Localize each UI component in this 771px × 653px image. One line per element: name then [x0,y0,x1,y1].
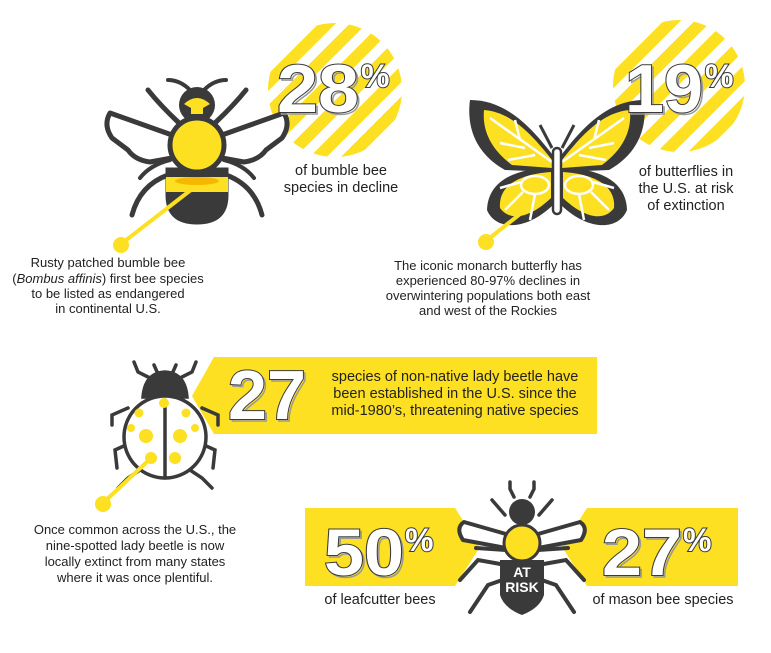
stat text: of bumble bee [295,163,387,179]
number 19% [625,51,733,129]
caption: where it was once plentiful. [56,570,213,585]
stat text: species of non-native lady beetle have [332,369,578,385]
caption: Once common across the U.S., the [34,522,236,537]
panel: bumble bee [12,23,402,316]
icon: butterfly [469,100,645,225]
caption: to be listed as endangered [31,286,185,301]
number 19%: 19 [627,53,705,129]
caption: Rusty patched bumble bee [31,255,185,270]
icon: lady beetle [112,362,218,488]
left banner [305,508,480,586]
caption: overwintering populations both east [386,288,591,303]
caption: (Bombus affinis) first bee species [12,271,204,286]
panel: butterfly [386,20,745,318]
number 50%: 50 [326,517,406,591]
caption: and west of the Rockies [419,303,558,318]
number 50%: % [405,522,433,558]
callout line and dot [478,210,525,250]
caption: nine-spotted lady beetle is now [46,538,225,553]
number 50%: 50 [324,515,404,589]
number 28%: % [361,58,389,94]
callout line and dot [113,186,196,253]
striped circle 28 [268,23,402,157]
icon: bumble bee [107,80,287,224]
number 19%: % [705,58,733,94]
caption: experienced 80-97% declines in [396,273,580,288]
number 27: 27 [228,356,306,434]
panel: solitary bees: RISK [505,579,539,595]
stat text: species in decline [284,180,398,196]
stat text right: of mason bee species [592,592,734,608]
number 28%: 28 [277,51,359,127]
number 27%: % [683,522,711,558]
number 27%: 27 [604,517,684,591]
stat text: mid-1980’s, threatening native species [331,403,579,419]
yellow banner [192,357,597,434]
stat text left: of leafcutter bees [324,592,436,608]
number 28%: 28 [279,53,361,129]
striped circle 19 [613,20,745,152]
panel: solitary bees [305,482,738,615]
stat text: been established in the U.S. since the [333,386,577,402]
label: at risk: AT [513,564,531,580]
caption: The iconic monarch butterfly has [394,258,582,273]
caption: in continental U.S. [55,301,161,316]
callout line and dot [95,459,150,512]
number 27% [602,515,711,591]
stat text: the U.S. at risk [638,181,734,197]
number 50% [324,515,433,591]
number 19%: 19 [625,51,703,127]
number 27%: 27 [602,515,682,589]
icon: at-risk bee [459,482,585,615]
stat text: of butterflies in [639,164,733,180]
number 28% [277,51,389,129]
stat text: of extinction [647,198,725,214]
caption: locally extinct from many states [45,554,226,569]
right banner [562,508,738,586]
panel: lady beetle [34,356,597,585]
number 27: 27 [230,358,308,436]
